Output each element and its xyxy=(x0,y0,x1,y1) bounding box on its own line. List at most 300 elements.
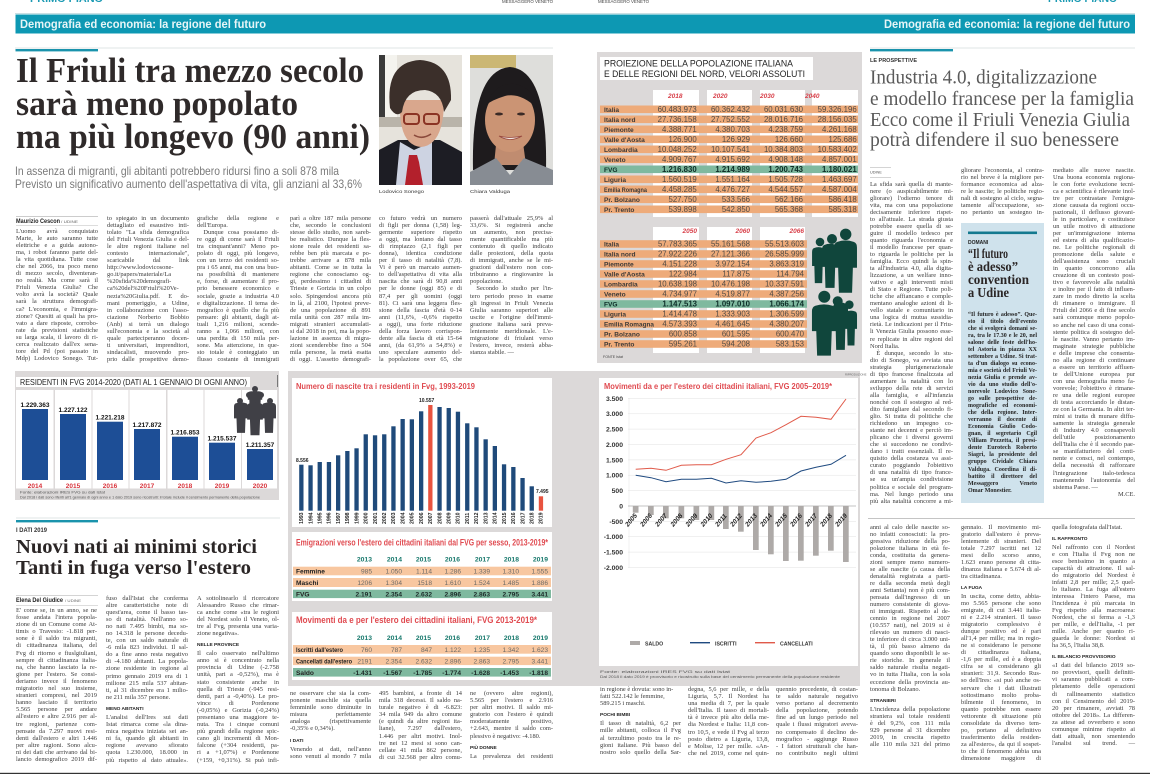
year labels xyxy=(28,483,268,490)
article text: column 6: grazioni dall'estero non con- xyxy=(470,264,553,271)
table: movements to and from abroad 2013-2019: Iscritti dall'estero xyxy=(296,647,343,654)
panel: gray backdrop for central charts xyxy=(288,371,867,686)
table 2018-2040: 4.238.759 xyxy=(768,125,803,134)
article text: Le prospettive column 1: re replicate in altre regioni del È dunque, secondo lo stu- xyxy=(870,336,953,357)
article text: column 3: tra cinquant'anni? Meno po- xyxy=(197,243,279,250)
table: emigration by sex 2013-2019: FVG xyxy=(296,591,310,598)
table 2050-2066: 27.121.366 xyxy=(711,250,750,259)
article text: column 5: nascita che sarà di 90,8 anni xyxy=(379,278,462,285)
table 2050-2066 xyxy=(600,227,807,359)
article text: I dati column 11: servare che i dati illustrati xyxy=(961,685,1041,692)
year labels: 2000 xyxy=(364,512,370,524)
article text: I dati column 4: I DATI xyxy=(290,739,304,744)
article text: I dati column 11: dunque positivo ed è pari xyxy=(961,628,1041,635)
year labels: 1996 xyxy=(327,512,333,524)
table 2018-2040: 27.752.552 xyxy=(711,115,750,124)
article text: column 6: popolazione. xyxy=(470,278,503,285)
y axis labels xyxy=(604,396,623,572)
article text: Le prospettive column 3: Friuli del 2066 e di fine secolo xyxy=(1053,307,1135,314)
table: emigration by sex 2013-2019: 2014 xyxy=(387,557,402,564)
article text: Le prospettive column 3: dell'assistenza sono cruciali xyxy=(1053,258,1135,265)
article text: Le prospettive column 1: più alta natalità concorre a mi- xyxy=(870,498,953,505)
article text: I dati column 5: tre nei 12 mesi si sono can- xyxy=(379,740,462,747)
legend xyxy=(630,641,813,648)
article text: Le prospettive column 1: famiglia. Ecco quindi la spin- xyxy=(870,258,953,265)
article text: Le prospettive column 3: tivo e favorevole alla natalità xyxy=(1053,279,1135,286)
article text: column 6: contenuto di quello indicato xyxy=(470,243,553,250)
table: emigration by sex 2013-2019: 2017 xyxy=(475,557,490,564)
y axis labels: -1.000 xyxy=(604,534,623,541)
year labels: 2004 xyxy=(400,512,406,524)
article text: I dati column 11: -1,6 per mille, ed è a doppia xyxy=(961,656,1041,663)
article text: Le prospettive column 2: gliorare l'economia, al contra- xyxy=(961,166,1044,174)
article text: column 4: be realistico. Dunque la fles- xyxy=(290,236,371,243)
article text: I dati column 9: quale i flussi migratori aveva- xyxy=(776,721,858,728)
article text: I dati column 3 xyxy=(197,594,279,764)
article text: I dati column 9: no compensato il declino de- xyxy=(776,729,858,736)
table 2050-2066: 55.513.603 xyxy=(765,240,804,249)
article text: I dati column 1: all'estero e altre 2.916 per al- xyxy=(16,713,97,720)
table: movements to and from abroad 2013-2019: Cancellati dall'estero xyxy=(296,658,352,665)
table 2050-2066: Lombardia xyxy=(604,282,638,289)
callout text: tel Astoria in piazza XX xyxy=(968,347,1037,353)
table: emigration by sex 2013-2019: Maschi xyxy=(296,580,319,587)
callout text: “Il futuro è adesso”. Que- xyxy=(968,312,1037,318)
table: emigration by sex 2013-2019: 1.114 xyxy=(416,568,432,576)
year labels: 2017 xyxy=(804,512,819,529)
article text: Le prospettive column 1: rietà. Le indicazioni per il Friu- xyxy=(870,321,953,328)
article text: column 4: sione reale dei residenti sa- xyxy=(290,243,371,250)
article text: Le prospettive column 3: ca e scientifica è rilevante inol- xyxy=(1053,188,1135,195)
article heading: I dati 2019 xyxy=(16,518,280,579)
article text: I dati column 10: re dalla seconda metà degli xyxy=(870,580,950,587)
table 2050-2066: 10.476.198 xyxy=(711,280,750,289)
article text: I dati column 1: denti dall'estero e altri 1.446 xyxy=(16,735,97,742)
chart: births among residents 1993-2019: Numero di nascite tra i residenti in Fvg, 1993-2019 xyxy=(296,382,476,391)
article text: I dati column 8 xyxy=(688,686,769,757)
table: emigration by sex 2013-2019: 1206 xyxy=(357,580,372,587)
year labels: 2012 xyxy=(729,512,744,529)
article text: column 4: trebbe arrivare a 878 mila xyxy=(290,257,371,264)
table 2050-2066: 4.519.877 xyxy=(715,290,750,299)
article text: column 3: polato di oggi, più longevo, xyxy=(197,250,279,257)
table 2018-2040: 1.214.989 xyxy=(715,165,751,174)
article text: Le prospettive column 3: tre per contrastare l'emigra- xyxy=(1053,195,1135,202)
article text: Le prospettive column 3: a essere un territorio affluen- xyxy=(1053,364,1135,371)
article text: I dati column 7: gioni italiane. Più basso del xyxy=(600,742,681,749)
article text: I dati column 11: quanto potrebbe non essere xyxy=(961,706,1041,713)
table: movements to and from abroad 2013-2019 xyxy=(292,612,552,680)
table 2018-2040: 28.156.035 xyxy=(818,115,857,124)
callout text: che della regione. Inter- xyxy=(968,410,1037,416)
article text: I dati column 12: vi saranno pubblicati a com- xyxy=(1052,676,1135,683)
table 2018-2040: 4.544.557 xyxy=(768,185,803,194)
year labels: 2015 xyxy=(774,512,789,529)
article text: I dati column 1: di cittadinanza italiana, del xyxy=(16,642,97,649)
article text: column 4: parì a oltre 187 mila persone xyxy=(290,215,371,222)
article text: column 3: sto totale è conteggiato un xyxy=(197,349,279,356)
article text: I dati column 5: turale negativo è di -6.823: xyxy=(379,704,462,711)
article text: I dati column 12: esce benissimo in quanto a xyxy=(1052,558,1135,565)
article text: column 4: migrati stranieri accumulati- xyxy=(290,321,371,328)
article text: Le prospettive column 1: plicano che i diversi governi xyxy=(870,434,953,441)
article text: I dati column 8: degna, 5,6 per mille, e della xyxy=(688,686,769,693)
article text: Le prospettive column 1: di tipo francese finalizzata ad xyxy=(870,371,953,378)
callout text: mografiche ed economi- xyxy=(968,403,1037,409)
top page header fragments xyxy=(30,0,1117,5)
article text: Le prospettive column 1: se su un'ampia condivisione xyxy=(870,476,953,483)
callout text: Economia Giulio Codo- xyxy=(968,424,1037,430)
table 2050-2066: 27.922.226 xyxy=(658,250,697,259)
article text: I dati column 7: Il tasso di natalità, 6,2 per xyxy=(600,720,681,727)
year labels: 2006 xyxy=(639,512,654,529)
table 2018-2040: FVG xyxy=(604,167,618,174)
article heading: I dati 2019: Nuovi nati ai minimi storici xyxy=(16,536,257,558)
article text: column 4: che, secondo le conclusioni xyxy=(290,222,371,229)
article text: I dati column 2: no nati 7.495 bimbi, ma so- xyxy=(106,623,188,630)
article text: column 5: anni, (da 61,9% a 54,8%) e xyxy=(379,342,462,349)
article text: column 6: stanza stabile. — xyxy=(470,349,514,356)
article text: column 4: solo. Spingendosi ancora più xyxy=(290,293,371,300)
table 2018-2040: 4.908.148 xyxy=(768,155,803,164)
article text: I dati column 8: e Molise, 12 per mille. «An- xyxy=(688,743,769,750)
year labels: 2008 xyxy=(437,512,443,524)
article text: I dati column 3: del Nordest solo il Veneto, ol- xyxy=(197,616,279,623)
table 2050-2066: 117.875 xyxy=(722,270,751,279)
table 2018-2040: 10.048.252 xyxy=(658,145,697,154)
article text: column 2: sull'economia e la società al xyxy=(107,328,189,335)
table 2018-2040: 10.107.541 xyxy=(711,145,750,154)
photo captions: Lodovico Sonego xyxy=(379,189,424,195)
article text: I dati column 10: anni al calo delle nascite so- xyxy=(870,524,950,530)
year labels: 2017 xyxy=(140,483,155,490)
callout text: Messaggero Veneto xyxy=(968,481,1037,487)
article text: I dati column 11: bilmente il fenomeno, in xyxy=(961,699,1041,706)
article text: Le prospettive column 1: di una natalità di tipo france- xyxy=(870,469,953,476)
article text: column 5: sione della fascia d'età 0-14 xyxy=(379,307,462,314)
y axis labels: -2.000 xyxy=(604,565,623,572)
article text: I dati column 10: quando sono disponibili le se- xyxy=(870,650,950,657)
table 2018-2040: 586.418 xyxy=(829,195,857,204)
article text: I dati column 5: 495 bambini, a fronte di 14 xyxy=(379,690,462,697)
year labels: 2012 xyxy=(474,512,480,524)
table 2050-2066: 4.151.228 xyxy=(662,260,697,269)
article text: I dati column 5: 34 mila 949 da altro comune xyxy=(379,711,462,718)
article text: I dati column 4: ne osservare che sia la com- xyxy=(290,690,371,697)
table: emigration by sex 2013-2019: 985 xyxy=(361,568,372,576)
article text: I dati column 11: cifra se si considerano gli xyxy=(961,663,1041,670)
callout text: ra, tra le 17.30 e le 20, nel xyxy=(968,333,1037,339)
table 2018-2040: 2018 xyxy=(667,93,683,100)
article text: column 3: e digitalizzazione. Il tema de- xyxy=(197,300,279,307)
table: movements to and from abroad 2013-2019: 787 xyxy=(391,647,402,654)
article text: I dati column 11: totale 7.297 iscritti nei 12 xyxy=(961,545,1041,552)
table 2018-2040: 1.551.164 xyxy=(715,175,751,184)
source note: Dal 2018 i dati sono riferiti all'1 gennaio di ogni anno e 1 dato 2019 sono ricostruiti: il totale include il censimento permanente della popolazione xyxy=(20,496,260,500)
article heading: Le prospettive: e modello francese per la famiglia xyxy=(870,89,1134,110)
article text: column 6: Giulia saranno superiori alle xyxy=(470,307,553,314)
value labels xyxy=(296,398,549,495)
table 2018-2040: 60.483.973 xyxy=(658,105,697,114)
article text: I dati column 12: Fvg rispetto alla macroarea: xyxy=(1052,607,1135,614)
table 2050-2066: Italia nord xyxy=(604,252,636,259)
article text: I dati column 3: cano gli incrementi di Mon- xyxy=(197,735,279,742)
article text: I dati column 1: stranieri compresi, nel 2019 xyxy=(16,692,97,699)
table: emigration by sex 2013-2019: 2.863 xyxy=(473,591,490,598)
article text: column 6: di immigrati, anche se le mi- xyxy=(470,257,553,264)
article text: Le prospettive column 3: dell'Italia che è il secondo pae- xyxy=(1053,441,1135,448)
table: movements to and from abroad 2013-2019: 1.623 xyxy=(531,647,548,654)
article text: I dati column 11: dinanza italiana e 5.674 di al- In uscita, come detto, abbia- xyxy=(961,566,1041,600)
article text: Le prospettive column 3: mantenendo l'autonomia del xyxy=(1053,477,1135,484)
chart: movements to and from abroad 2005-2019: Movimenti da e per l'estero dei cittadini italiani, FVG 2005–2019* xyxy=(604,382,833,391)
table: emigration by sex 2013-2019: 1.050 xyxy=(385,568,402,576)
article text: I dati column 9: no contribuito negli ultimi xyxy=(776,750,858,757)
article text: I dati column 10: rilevato un numero di nasci- xyxy=(870,629,950,636)
table 2018-2040: 4.261.168 xyxy=(822,125,857,134)
table 2018-2040: 542.850 xyxy=(722,205,751,214)
callout text: Valduga. Coordina il di- xyxy=(968,467,1037,473)
article text: Le prospettive column 3: di testa accorciando le distan- xyxy=(1053,399,1135,406)
article text: I dati column 12: IL RAFFRONTO xyxy=(1052,537,1088,542)
article text: column 4: abitanti. Come se in tutta la xyxy=(290,264,371,271)
table 2050-2066: 10.638.198 xyxy=(658,280,697,289)
table 2018-2040: Italia xyxy=(604,107,619,114)
article text: column 2: tolato "La sfida demografica xyxy=(107,229,189,236)
article text: Le prospettive column 1: strategia plurigenerazionale xyxy=(870,364,953,371)
table: emigration by sex 2013-2019: 1.286 xyxy=(444,568,461,576)
table 2018-2040: 4.909.767 xyxy=(662,155,697,164)
article text: column 2: sindacalisti, muovendo pro- xyxy=(107,349,189,356)
year labels: 2005 xyxy=(410,512,416,524)
article text: column 2: contesto internazionale", xyxy=(107,250,189,257)
callout text: ta d'un dialogo su econo- xyxy=(968,361,1037,367)
year labels: 2014 xyxy=(28,483,43,490)
callout box: Domani convention a Udine: è adesso” xyxy=(968,259,1018,274)
callout text: norevole Lodovico Sone- xyxy=(968,389,1037,395)
article text: Le prospettive column 1: ta all'industria 4.0, alla digita- xyxy=(870,265,953,272)
article text: Le prospettive column 3: creazione di un contesto posi- xyxy=(1053,272,1135,279)
article text: I dati column 1: E' come se, in un anno, se ne xyxy=(16,607,97,614)
y axis labels: 0 xyxy=(619,503,623,510)
table: emigration by sex 2013-2019: 2.354 xyxy=(385,591,402,598)
article text: I dati column 10: ni immigrati. Rispetto al de- xyxy=(870,608,950,615)
article text: I dati column 11: emigrate, di cui 3.441 italia- xyxy=(961,607,1041,614)
article text: column 2: dettagliato ed esaustivo inti- xyxy=(107,222,189,229)
section banner: Demografia ed economia: la regione del futuro xyxy=(20,19,266,31)
article text: column 4: di oggi. L'assetto demografi- xyxy=(290,356,371,363)
value labels: 1.221.218 xyxy=(96,415,125,422)
value labels: 1.216.853 xyxy=(171,430,200,437)
table: movements to and from abroad 2013-2019: 2.632 xyxy=(415,658,432,665)
article text: I dati column 7: POCHI BIMBI xyxy=(600,713,630,718)
article text: I dati column 2: no 14.318 le persone decedu- xyxy=(106,630,188,637)
article text: Le prospettive column 2: nali di sostegno al ciclo, segna- xyxy=(961,195,1044,202)
article text: I dati column 6: plessivo è negativo: -4.180. xyxy=(470,733,540,740)
year labels: 1998 xyxy=(345,512,351,524)
article text: Le prospettive column 1: sviluppo della rete di servizi xyxy=(870,385,953,392)
article text: Le prospettive column 1: quanto riguarda l'economia e xyxy=(870,237,953,244)
article text: I dati column 1: per altre ragioni. Sono alcu- xyxy=(16,742,97,749)
article text: column 4: zioni scenderebbe fino a 504 xyxy=(290,342,371,349)
year labels: 2017 xyxy=(520,512,526,524)
callout text: Siagri, la presidente del xyxy=(968,452,1037,458)
article text: I dati column 1: ni dei dati che arrivano dal bi- xyxy=(16,749,97,756)
article text: column 4: mila persone, la metà esatta xyxy=(290,349,371,356)
table: movements to and from abroad 2013-2019: 2019 xyxy=(533,635,548,642)
article text: column 5: per il tasso di natalità (7,8). xyxy=(379,257,462,264)
y axis labels: 1.000 xyxy=(606,473,623,480)
year labels: 2013 xyxy=(744,512,759,529)
callout text: vio da uno studio dell'o- xyxy=(968,382,1037,388)
article text: column 3: una perdita di 150 mila per- xyxy=(197,335,279,342)
article text: I dati column 12: infatti 2,8 per mille; 2,5 quel- xyxy=(1052,579,1135,586)
table 2050-2066: 57.783.365 xyxy=(658,240,698,249)
article text: column 6: mente quantificabile ma più xyxy=(470,236,553,243)
article text: I dati column 12: capacità di attrazione. Il sal- xyxy=(1052,565,1135,572)
article text: Le prospettive column 1: aumentare la natalità con lo xyxy=(870,378,953,385)
table 2050-2066: FONTE Istat xyxy=(603,355,623,359)
table 2050-2066: Piemonte xyxy=(604,262,634,269)
article text: I dati column 11: gennaio. Il movimento mi- xyxy=(961,524,1041,530)
article text: I dati column 5: liane), 7.297 dall'estero, xyxy=(379,725,462,732)
article text: column 2: nezia%20Giulia.pdf. E do- xyxy=(107,293,189,300)
year labels: 2010 xyxy=(456,512,462,524)
article text: column 3: ranno a 1,066 milioni, con xyxy=(197,328,279,335)
article text: column 3: tuali 1,216 milioni, scende- xyxy=(197,321,279,328)
article text: Le prospettive column 1: vello statale e comunitario in xyxy=(870,307,953,314)
year labels: 2014 xyxy=(759,512,774,529)
article text: I dati column 2: primo gennaio 2019 era di 1 xyxy=(106,673,188,680)
line: cancelled xyxy=(636,399,846,470)
article text: column 5: della forza lavoro corrispon- xyxy=(379,328,462,335)
table 2050-2066: 595.261 xyxy=(669,340,697,349)
subheadline: In assenza di migranti, gli abitanti potrebbero ridursi fino a soli 878 mila xyxy=(15,164,339,178)
value labels: 1.229.363 xyxy=(21,402,50,409)
table: movements to and from abroad 2013-2019: 847 xyxy=(421,647,432,654)
article text: I dati column 1: zione di un Comune come At- xyxy=(16,621,97,628)
article text: I dati column 11: mesi dello scorso anno, xyxy=(961,552,1041,559)
year labels: 2016 xyxy=(511,512,517,524)
article text: column 5: 81). Ci sarà una leggera fles- xyxy=(379,300,462,307)
table 2018-2040: 126.929 xyxy=(722,135,750,144)
year labels: 2001 xyxy=(373,512,379,524)
article text: column 6: uscite e l'origine dell'immi- xyxy=(470,314,553,321)
year labels: 2007 xyxy=(654,512,669,529)
article text: I dati column 12: guarda le donne: Nordest si «I dati del bilancio 2019 so- xyxy=(1052,635,1135,669)
article text: I dati column 2: so di natalità. Nell'anno so- xyxy=(106,616,188,623)
table 2018-2040: 2030 xyxy=(759,93,775,100)
article text: Le prospettive column 1: dio di Sonego, va avviata una xyxy=(870,357,953,364)
article text: I dati column 2: te, con un saldo naturale di xyxy=(106,637,188,644)
article text: I dati column 10: cennio in regione nel 2007 xyxy=(870,615,950,622)
table 2018-2040: 10.583.402 xyxy=(818,145,857,154)
article text: I dati column 4: sono venuti al mondo 7 mila xyxy=(290,753,371,760)
table 2050-2066: 4.461.645 xyxy=(715,320,751,329)
callout box: Domani convention a Udine: DOMANI xyxy=(968,240,989,246)
article text: I dati column 12: IL BILANCIO PROVVISORIO xyxy=(1052,655,1116,660)
table: movements to and from abroad 2013-2019: 2.354 xyxy=(385,658,402,665)
article text: I dati column 3: nuta. Tra i cinque comuni xyxy=(197,721,279,728)
article text: Le prospettive column 3: della necessità di rafforzare xyxy=(1053,462,1135,469)
article text: Le prospettive column 3: maginate strategie pubbliche xyxy=(1053,343,1135,350)
article text: Le prospettive column 1: nonché con il sostegno al red- xyxy=(870,399,953,406)
callout text: battito il direttore del xyxy=(968,474,1037,480)
projection panel: population of Italy and northern regions xyxy=(597,52,862,363)
year labels: 2005 xyxy=(624,512,639,529)
table: movements to and from abroad 2013-2019: -1.818 xyxy=(529,670,548,677)
article text: column 5: to dell'aspettativa di vita alla xyxy=(379,271,462,278)
article text: column 5: co futuro vedrà un numero xyxy=(379,215,462,222)
article text: I dati column 2: ti, al 31 dicembre era 1 milio- L'analisi dell'Ires sui dati xyxy=(106,687,188,721)
article text: column 4: lazione in assenza di migra- xyxy=(290,335,371,342)
article text: I dati column 6: PIÙ DONNE xyxy=(470,746,497,751)
table 2050-2066: Valle d'Aosta xyxy=(604,272,645,279)
article text: column 3: flusso costante di immigrati xyxy=(197,356,279,363)
article text: I dati column 7: in regione è dovuta: sono in- xyxy=(600,686,673,693)
table: emigration by sex 2013-2019: 1.524 xyxy=(473,580,490,587)
article text: I dati column 10: zioni sempre meno numero- xyxy=(870,559,950,566)
article text: I dati column 12: lo italiano. La fuga all'estero xyxy=(1052,586,1135,593)
line: registered xyxy=(636,455,846,483)
article text: I dati column 5: di cui 32.568 per altro comu- xyxy=(379,754,462,761)
article text: Le prospettive column 3: sistema Paese. — xyxy=(1053,484,1098,491)
photo: Chiara Valduga xyxy=(470,55,553,185)
article text: column 1: Mdp) Lodovico Sonego. Tut- xyxy=(16,355,98,362)
subheadline xyxy=(15,164,362,191)
article text: Le prospettive column 3 xyxy=(1053,166,1135,498)
table: emigration by sex 2013-2019: 2015 xyxy=(416,557,431,564)
article text: I dati column 3: provincia di Udine (-2.758 xyxy=(197,664,279,671)
article text: column 2: %20sfida%20demografi- xyxy=(107,278,171,285)
article text: column 4: de una popolazione di 891 xyxy=(290,307,371,314)
article text: column 4: regione che conosciamo og- xyxy=(290,271,371,278)
table 2018-2040: Emilia Romagna xyxy=(604,187,647,194)
article text: I dati column 11: lentemente di stranieri. Del xyxy=(961,538,1041,545)
article text: column 3: pra i 65 anni, ma con una buo- xyxy=(197,264,279,271)
article text: I dati column 8: dell'Italia. Il tasso di mortali- xyxy=(688,707,769,714)
table 2018-2040: Pr. Trento xyxy=(604,207,634,214)
article text: I dati column 4 xyxy=(290,690,371,760)
article text: I dati column 10: pensata dall'ingresso di un xyxy=(870,594,950,601)
y axis labels: 3.500 xyxy=(606,396,623,403)
article text: Le prospettive column 1: quisito della costanza va assi- xyxy=(870,455,953,462)
article text: Le prospettive column 1: vativo e agli interventi misti xyxy=(870,279,953,286)
article text: Le prospettive column 1: potrebbe essere quella di se- xyxy=(870,223,953,230)
y axis labels: 3.000 xyxy=(606,411,623,418)
table: movements to and from abroad 2013-2019: 2.863 xyxy=(473,658,490,665)
article text: I dati column 1: na, che hanno lasciato la re- xyxy=(16,664,97,671)
article text: I dati column 12: interessa l'intero Paese, ma xyxy=(1052,593,1135,600)
table: movements to and from abroad 2013-2019: -1.431 xyxy=(353,670,372,677)
year labels: 2015 xyxy=(502,512,508,524)
article text: column 1: vato a dare risposte, corrobo- xyxy=(16,320,98,327)
article text: column 6: migrazione di friulani verso xyxy=(470,335,553,342)
year labels: 2015 xyxy=(66,483,81,490)
table 2050-2066: 114.794 xyxy=(776,270,805,279)
article text: column 1: zione? Quesiti ai quali ha pro- xyxy=(16,313,98,320)
article text: I dati column 8: tà è invece più alto della me- xyxy=(688,714,769,721)
article text: column 5: donna), identica condizione xyxy=(379,250,462,257)
article text: column 4: mila unità con 287 mila im- xyxy=(290,314,371,321)
article text: column 5: a oggi), una forte riduzione xyxy=(379,321,462,328)
main headline: Il Friuli tra mezzo secolo xyxy=(16,51,364,90)
table 2050-2066: 2060 xyxy=(735,228,750,235)
article text: Le prospettive column 3: per un'immigrazione interna xyxy=(1053,230,1135,237)
panel: gray backdrop for central charts: RIPRODUZIONE xyxy=(845,372,867,376)
article text: column 3: e, forse, di aumentare il pro- xyxy=(197,278,279,285)
article text: I dati column 6: +2.643, mentre il saldo com- La prevalenza dei residenti xyxy=(470,725,553,760)
